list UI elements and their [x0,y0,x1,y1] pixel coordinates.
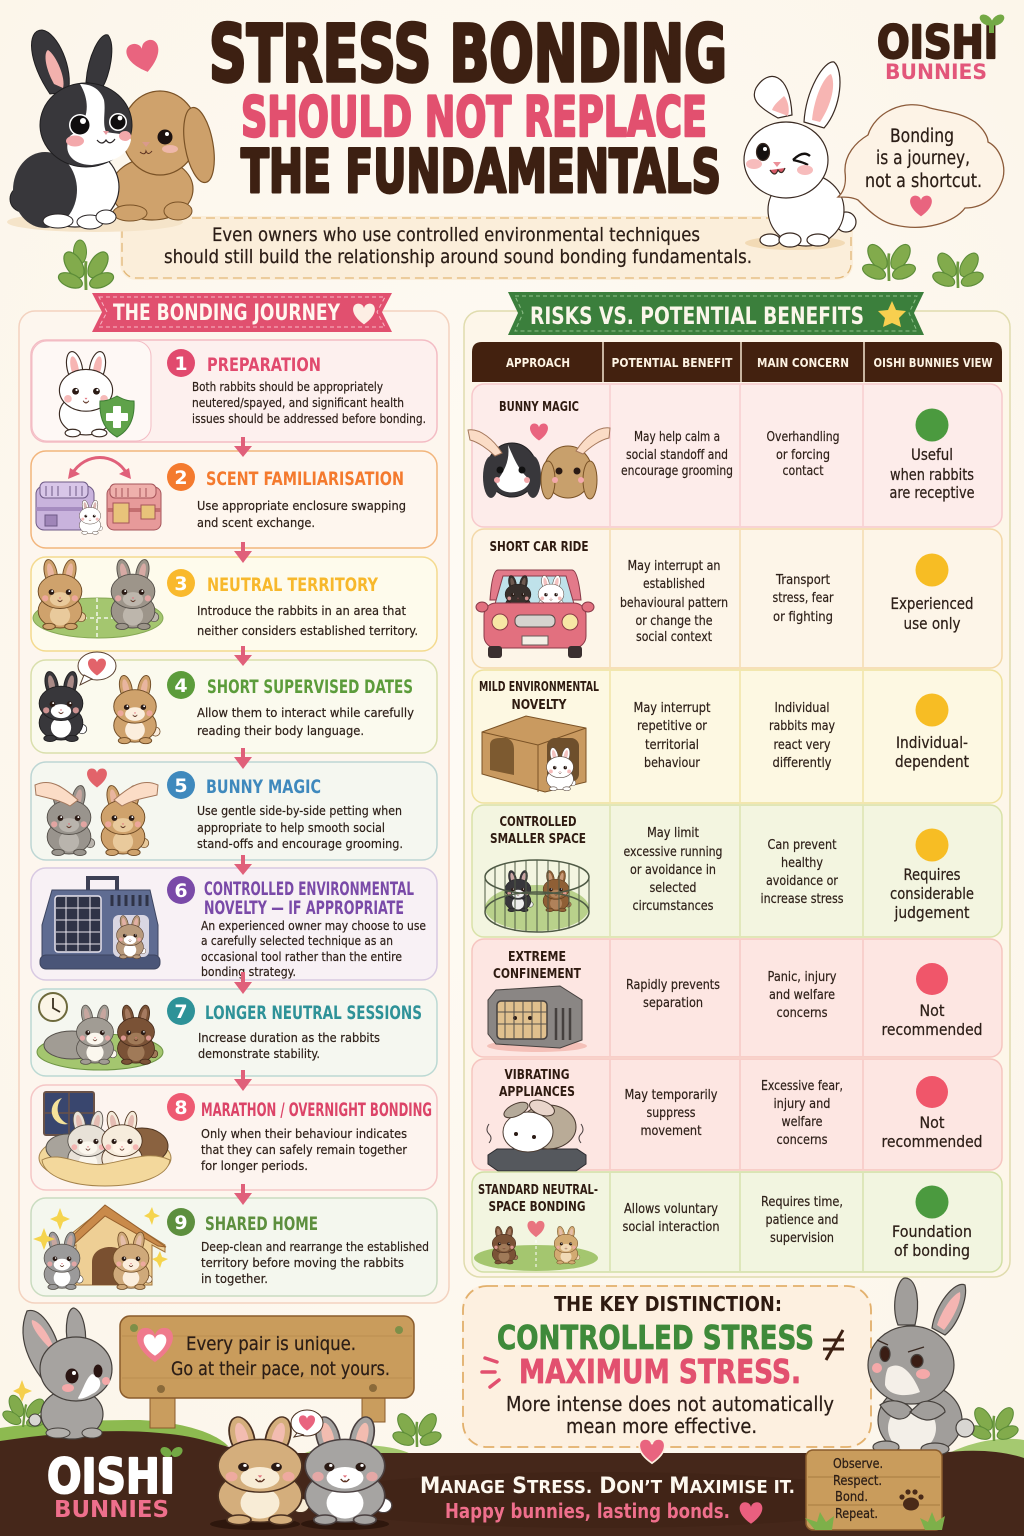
panel: the bonding journey [19,293,449,1303]
main concern: Panic, injury [768,970,837,985]
icon: heart top left [125,38,163,76]
main concern: concerns [776,1006,828,1021]
subtitle banner [120,216,853,280]
wooden sign: observe respect bond repeat: Bond. [835,1490,868,1505]
potential benefit [622,1202,720,1235]
step 9: shared home [31,1198,437,1296]
arrow: step 4 to 5 [234,748,252,769]
step 5: bunny magic [31,762,437,860]
main concern [761,1195,843,1246]
row: bunny magic [468,384,1002,527]
number badge 7: 7 [174,1001,188,1023]
step heading: NOVELTY — IF APPROPRIATE [204,898,404,919]
step 9: shared home: SHARED HOME [205,1214,318,1235]
arrow: step 6 to 7 [234,972,252,994]
view: amber rating: judgement [894,903,970,922]
number badge 6 [167,876,195,904]
illustration: petting hands and two rabbits [35,769,158,856]
approach name [490,815,586,847]
icon: heart badge [137,1328,173,1362]
description: Deep-clean and rearrange the established [201,1239,429,1254]
row: bunny magic: BUNNY MAGIC [499,400,579,415]
heading ribbon: the bonding journey [92,293,392,332]
description: territory before moving the rabbits [201,1255,404,1270]
row: vibrating appliances [472,1059,1002,1171]
step 1: preparation [31,340,437,442]
potential benefit: May interrupt [634,701,710,716]
speech bubble: bonding is a journey: not a shortcut. [865,171,982,192]
panel: the key distinction: More intense does not automatically [506,1392,834,1416]
approach name [479,680,599,713]
speech bubble: bonding is a journey: is a journey, [876,148,970,169]
potential benefit: encourage grooming [621,464,733,479]
ground with grass [0,1420,1024,1536]
description [197,603,418,638]
main concern: supervision [770,1231,834,1246]
step 3: neutral territory: NEUTRAL TERRITORY [207,575,378,596]
potential benefit: May interrupt an [628,559,720,574]
number badge 8 [167,1093,195,1121]
approach name [493,950,581,982]
potential benefit: movement [640,1124,702,1139]
illustration: rabbits on neutral mat [474,1221,598,1271]
row: short car ride: SHORT CAR RIDE [490,540,588,555]
panel: the key distinction: mean more effective. [566,1414,757,1438]
logo top right: BUNNIES [885,60,987,84]
view: amber rating: Requires [904,865,960,884]
icon: pink emphasis marks [482,1358,499,1387]
title: THE FUNDAMENTALS [241,137,721,207]
potential benefit: repetitive or [637,719,708,734]
description [201,1126,408,1173]
approach name [478,1183,598,1215]
panel: the key distinction: THE KEY DISTINCTION: [554,1292,782,1316]
potential benefit: suppress [646,1106,696,1121]
illustration: swapped enclosures [36,458,161,534]
description: Allow them to interact while carefully [197,705,415,720]
potential benefit: or change the [636,614,712,629]
illustration: cardboard box [482,716,586,792]
view: green rating: are receptive [890,483,974,502]
approach name: SMALLER SPACE [490,832,586,847]
main concern [768,970,837,1021]
illustration: rabbits at wooden house [33,1205,168,1290]
potential benefit: selected [650,881,696,896]
hero: black-and-white and tan bunnies [7,30,219,232]
potential benefit: or avoidance in [630,863,716,878]
potential benefit: separation [643,996,703,1011]
winking white bunny [744,62,856,250]
arrow: step 3 to 4 [234,646,252,666]
view: red rating: recommended [882,1020,982,1039]
description: issues should be addressed before bonding. [192,411,426,426]
number badge 3: 3 [174,573,188,595]
panel: the key distinction [462,1285,872,1463]
main concern: healthy [781,856,823,871]
illustration: two rabbits on neutral mat [33,558,163,638]
description: reading their body language. [197,723,364,738]
illustration: rabbit on vibrating plate [487,1097,586,1171]
view: red rating: Not [920,1113,944,1132]
arrow: step 1 to 2 [234,437,252,457]
row: mild environmental novelty [472,670,1002,803]
arrow: step 2 to 3 [234,542,252,563]
main concern: Transport [775,573,830,588]
description: Use gentle side-by-side petting when [197,803,402,818]
table header: OISHI BUNNIES VIEW [874,355,993,370]
arrow: step 7 to 8 [234,1070,252,1091]
potential benefit: Rapidly prevents [626,978,720,993]
description: Use appropriate enclosure swapping [197,498,406,513]
approach name: MILD ENVIRONMENTAL [479,680,599,695]
step 6: controlled environmental novelty [31,868,437,980]
potential benefit [624,1088,718,1139]
table header [472,342,1002,382]
title: SHOULD NOT REPLACE [241,85,707,149]
view: green rating [892,1186,972,1260]
speech bubble: bonding is a journey: Bonding [890,126,954,147]
illustration: two rabbits and heart bubble [39,652,160,744]
main concern: contact [782,464,824,479]
view: green rating: Useful [911,445,953,464]
main concern: Individual [774,701,830,716]
step 7: longer neutral sessions [31,989,437,1076]
step heading [204,879,414,919]
approach name: VIBRATING [504,1068,570,1083]
potential benefit: social interaction [622,1220,720,1235]
potential benefit: established [643,577,705,592]
potential benefit: May help calm a [634,430,720,445]
wooden sign: every pair is unique: Go at their pace, not yours. [171,1358,390,1380]
description: neither considers established territory. [197,623,418,638]
description: a carefully selected technique as an [201,933,393,948]
potential benefit: May limit [647,826,699,841]
description: Both rabbits should be appropriately [192,379,383,394]
number badge 3 [167,569,195,597]
view: amber rating [895,694,969,771]
wooden sign: observe respect bond repeat: Observe. [833,1457,883,1472]
view: amber rating: Individual- [896,733,968,752]
wooden sign: observe respect bond repeat: Respect. [833,1474,882,1489]
illustration: petted lop rabbits [468,423,610,499]
description [197,803,403,851]
icon: ground sprigs [0,1391,1020,1448]
potential benefit: May temporarily [624,1088,718,1103]
potential benefit: social standoff and [626,448,728,463]
description [198,1030,380,1061]
wooden sign: every pair is unique: Every pair is unique. [186,1333,356,1355]
potential benefit: social context [636,630,712,645]
heading ribbon: the bonding journey: THE BONDING JOURNEY [113,301,341,326]
potential benefit: Allows voluntary [624,1202,718,1217]
step 8: marathon overnight bonding: MARATHON / OVERNIGHT BONDING [201,1100,432,1121]
main concern: welfare [782,1115,823,1130]
wooden sign: observe respect bond repeat [805,1450,945,1530]
main concern: patience and [766,1213,838,1228]
description: occasional tool rather than the entire [201,949,402,964]
illustration: clock and resting rabbits [37,993,163,1070]
description: demonstrate stability. [198,1046,320,1061]
approach name: APPLIANCES [499,1085,575,1100]
potential benefit: circumstances [632,899,714,914]
view: red rating: recommended [882,1132,982,1151]
potential benefit [626,978,720,1011]
number badge 8: 8 [174,1097,188,1119]
approach name: STANDARD NEUTRAL- [478,1183,598,1198]
view: amber rating [890,828,974,922]
title: STRESS BONDING [209,10,727,100]
row: controlled smaller space [472,805,1002,937]
panel: risks vs potential benefits [464,292,1010,1277]
potential benefit [620,559,728,645]
main concern: concerns [776,1133,828,1148]
view: amber rating: considerable [890,884,974,903]
logo top right: OISHI [877,16,998,69]
main concern: and welfare [769,988,835,1003]
panel: the key distinction: CONTROLLED STRESS [497,1318,814,1357]
number badge 2 [167,463,195,491]
step 8: marathon overnight bonding [31,1085,437,1190]
main concern [769,701,835,771]
number badge 4: 4 [174,675,188,697]
description: for longer periods. [201,1158,308,1173]
number badge 4 [167,671,195,699]
row: standard neutral-space bonding [472,1172,1002,1272]
potential benefit: territorial [645,738,699,753]
number badge 1 [167,349,195,377]
potential benefit: behavioural pattern [620,596,728,611]
main concern: injury and [774,1097,830,1112]
description: Introduce the rabbits in an area that [197,603,406,618]
view: amber rating: Experienced [890,594,974,613]
number badge 9 [167,1208,195,1236]
step 4: short supervised dates: SHORT SUPERVISED DATES [207,677,413,698]
view: red rating [882,1076,982,1151]
main concern [772,573,834,625]
main concern: Overhandling [766,430,840,445]
description [197,498,406,530]
footer logo: BUNNIES [54,1497,169,1523]
approach name: SPACE BONDING [488,1200,586,1215]
description: and scent exchange. [197,515,315,530]
illustration: blue carrier with rabbit [40,878,160,969]
icon: paw print [899,1489,924,1510]
description [201,1239,429,1286]
step 7: longer neutral sessions: LONGER NEUTRAL SESSIONS [205,1003,422,1024]
main concern: Excessive fear, [761,1079,843,1094]
potential benefit: excessive running [624,845,722,860]
description: that they can safely remain together [201,1142,408,1157]
wooden sign: observe respect bond repeat: Repeat. [835,1507,878,1522]
number badge 7 [167,997,195,1025]
icon: not equal [823,1330,844,1360]
description: stand-offs and encourage grooming. [197,836,403,851]
wooden sign: every pair is unique [120,1316,414,1428]
heading ribbon: risks vs potential benefits [508,292,924,335]
table header: APPROACH [506,355,570,370]
icon: leaf sprigs top [56,240,985,291]
thinking grey bunny [868,1278,974,1456]
main concern: increase stress [760,892,844,907]
number badge 6: 6 [174,880,188,902]
view: green rating: of bonding [894,1241,970,1260]
main concern: Can prevent [768,838,836,853]
table header: MAIN CONCERN [757,355,849,370]
main concern: differently [772,756,832,771]
illustration: night window and rabbits in bed [39,1092,171,1186]
approach name: EXTREME [508,950,566,965]
approach name [499,1068,575,1100]
bunny: grey with sparkle [13,1308,112,1439]
title [209,10,727,207]
logo top right [877,12,1006,84]
arrow: step 8 to 9 [234,1184,252,1205]
approach name: CONTROLLED [500,815,577,830]
illustration: tight grey carrier [487,986,587,1052]
row: extreme confinement [472,939,1002,1057]
description: appropriate to help smooth social [197,820,385,835]
potential benefit [621,430,733,479]
description: in together. [201,1271,268,1286]
description: An experienced owner may choose to use [201,918,426,933]
view: red rating [882,963,982,1039]
main concern: or forcing [776,448,830,463]
potential benefit: behaviour [644,756,701,771]
description: bonding strategy. [201,964,296,979]
footer tagline: Happy bunnies, lasting bonds. [445,1499,730,1523]
number badge 5: 5 [174,775,188,797]
description [197,705,415,738]
number badge 2: 2 [174,467,188,489]
main concern: Requires time, [761,1195,843,1210]
view: green rating: Foundation [892,1222,972,1241]
speech bubble: bonding is a journey [838,105,1004,227]
view: red rating: Not [920,1001,944,1020]
description: Only when their behaviour indicates [201,1126,407,1141]
footer tagline: MANAGE STRESS. DON’T MAXIMISE IT. [420,1474,795,1499]
step 2: scent familiarisation: SCENT FAMILIARISATION [206,469,404,490]
description [192,379,426,426]
illustration: pink car with rabbits [476,570,594,658]
potential benefit [634,701,710,771]
table header: POTENTIAL BENEFIT [612,355,733,370]
main concern: react very [774,738,831,753]
main concern: stress, fear [772,591,834,606]
potential benefit [624,826,722,914]
main concern: avoidance or [766,874,839,889]
number badge 1: 1 [174,353,188,375]
approach name: NOVELTY [512,698,567,713]
approach name: CONFINEMENT [493,967,581,982]
footer logo: OISHI [47,1449,175,1505]
description: Increase duration as the rabbits [198,1030,380,1045]
footer logo [47,1445,184,1523]
main concern [760,838,844,907]
step 4: short supervised dates [31,652,437,753]
arrow: step 5 to 6 [234,855,252,875]
step heading: CONTROLLED ENVIRONMENTAL [204,879,414,900]
main concern: rabbits may [769,719,835,734]
step 5: bunny magic: BUNNY MAGIC [206,777,321,798]
step 2: scent familiarisation [31,451,437,548]
view: amber rating: dependent [895,752,969,771]
view: green rating [890,408,974,502]
view: green rating: when rabbits [890,465,974,484]
description [201,918,426,979]
main concern [761,1079,843,1148]
view: amber rating: use only [904,614,960,633]
step 1: preparation: PREPARATION [207,355,321,376]
footer tagline [420,1474,795,1524]
main concern: or fighting [773,610,833,625]
subtitle banner: should still build the relationship around sound bonding fundamentals. [164,246,752,268]
view: amber rating [890,554,974,633]
number badge 5 [167,771,195,799]
row: short car ride [472,529,1002,668]
illustration: round pen with rabbits [485,860,589,932]
illustration: white bunny with health shield [32,341,151,441]
footer bunnies with heart bubble [210,1410,392,1530]
number badge 9: 9 [174,1212,188,1234]
panel: the key distinction: MAXIMUM STRESS. [519,1352,801,1391]
main concern [766,430,840,479]
step 3: neutral territory [31,557,437,651]
heading ribbon: risks vs potential benefits: RISKS VS. POTENTIAL BENEFITS [530,302,864,330]
subtitle banner: Even owners who use controlled environmental techniques [212,224,700,246]
description: neutered/spayed, and significant health [192,395,404,410]
